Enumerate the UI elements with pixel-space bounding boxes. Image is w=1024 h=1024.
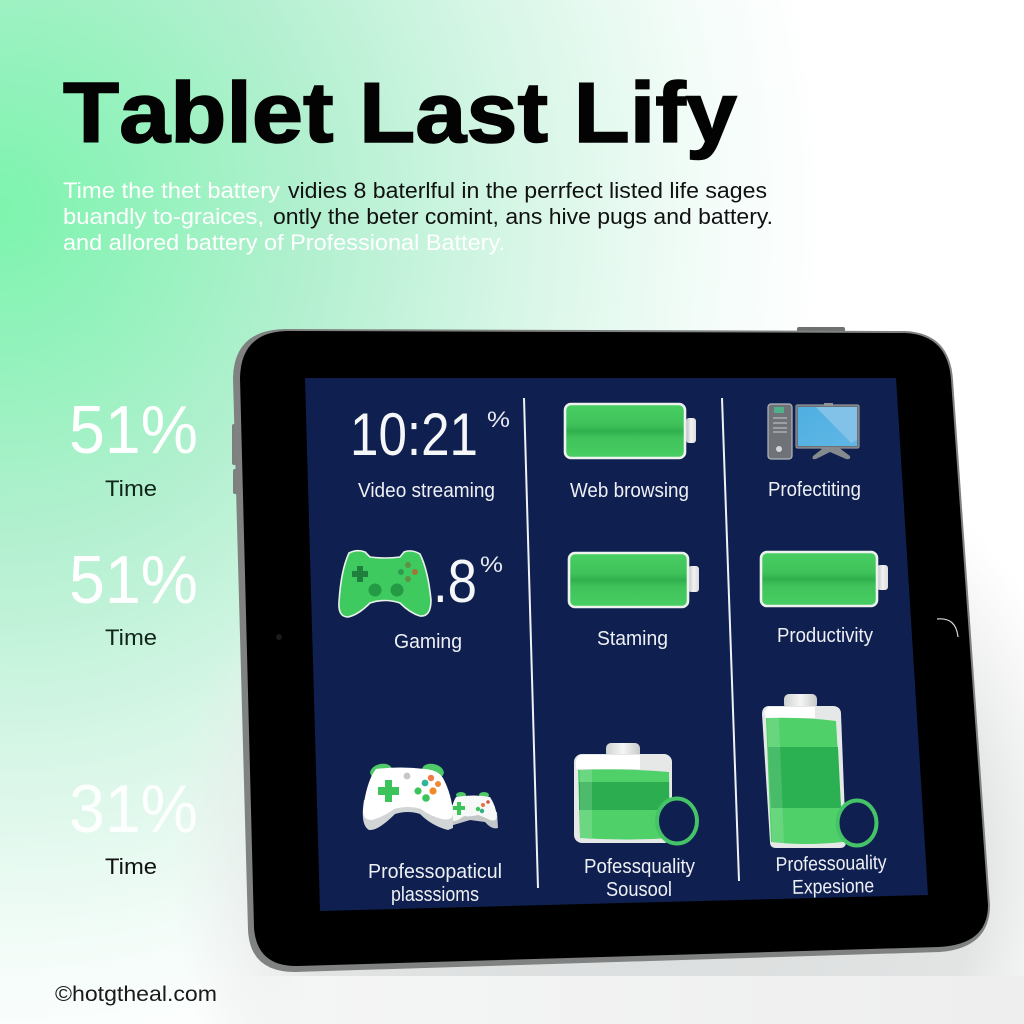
- stat: 51% time second: 51%: [69, 542, 198, 618]
- gaming metric: Gaming: [394, 631, 462, 653]
- staming battery: Staming: [597, 628, 668, 650]
- column dividers: [524, 398, 739, 888]
- web browsing battery: Web browsing: [570, 480, 689, 502]
- intro text block: [63, 178, 773, 255]
- home button: [937, 619, 958, 637]
- stat: 51% time second: [69, 542, 198, 650]
- professional controllers: [363, 762, 502, 906]
- professional controllers: Professopaticul: [368, 861, 502, 883]
- camera: [276, 634, 282, 640]
- icon: desktop tower: [768, 404, 792, 459]
- intro text block: Time the thet battery: [63, 178, 280, 203]
- intro text block: vidies 8 baterlful in the perrfect listed life sages: [288, 178, 767, 203]
- stat: 51% time: 51%: [69, 392, 198, 468]
- icon: monitor: [796, 403, 859, 459]
- professional quality tall battery: Professouality: [775, 852, 887, 876]
- intro text block: and allored battery of Professional Battery.: [63, 230, 505, 255]
- tablet rim: [233, 329, 990, 972]
- web browsing battery: [565, 404, 696, 502]
- intro text block: ontly the beter comint, ans hive pugs and battery.: [273, 204, 773, 229]
- gaming metric: %: [480, 552, 503, 577]
- video streaming metric: [350, 401, 510, 502]
- staming battery: [569, 553, 699, 650]
- side buttons: [232, 327, 845, 494]
- professional controllers: plasssioms: [391, 884, 479, 906]
- professional quality short battery: [574, 743, 697, 901]
- icon: white controller large: [363, 762, 453, 830]
- computer icon and label: [768, 403, 861, 501]
- professional quality short battery: Sousool: [606, 879, 672, 901]
- stat: 31% time: [69, 771, 198, 879]
- stat: 31% time: Time: [105, 854, 157, 879]
- status ring: [657, 798, 697, 844]
- title: Tablet Last Lify: [63, 66, 737, 161]
- gaming metric: .8: [433, 548, 477, 615]
- icon: white controller small: [450, 792, 498, 828]
- video streaming metric: 10:21: [350, 401, 478, 468]
- productivity battery: [761, 552, 888, 647]
- floor: [190, 976, 1024, 1024]
- video streaming metric: %: [487, 407, 510, 432]
- professional quality tall battery: Expesione: [792, 875, 874, 899]
- stat: 51% time: Time: [105, 476, 157, 501]
- tablet bezel: [240, 331, 988, 966]
- screen: [305, 378, 928, 911]
- computer icon and label: Profectiting: [768, 479, 861, 501]
- professional quality short battery: Pofessquality: [584, 856, 695, 878]
- wall shadow behind tablet: [160, 380, 1024, 1024]
- professional quality tall battery: [762, 694, 887, 899]
- video streaming metric: Video streaming: [358, 480, 495, 502]
- footer credit: ©hotgtheal.com: [55, 983, 217, 1006]
- stat: 51% time second: Time: [105, 625, 157, 650]
- stat: 51% time: [69, 392, 198, 501]
- stat: 31% time: 31%: [69, 771, 198, 847]
- intro text block: buandly to-graices,: [63, 204, 264, 229]
- gaming metric: [339, 548, 503, 653]
- tablet: [232, 327, 990, 972]
- productivity battery: Productivity: [777, 625, 873, 647]
- status ring: [838, 800, 876, 846]
- icon: green gamepad: [339, 551, 431, 617]
